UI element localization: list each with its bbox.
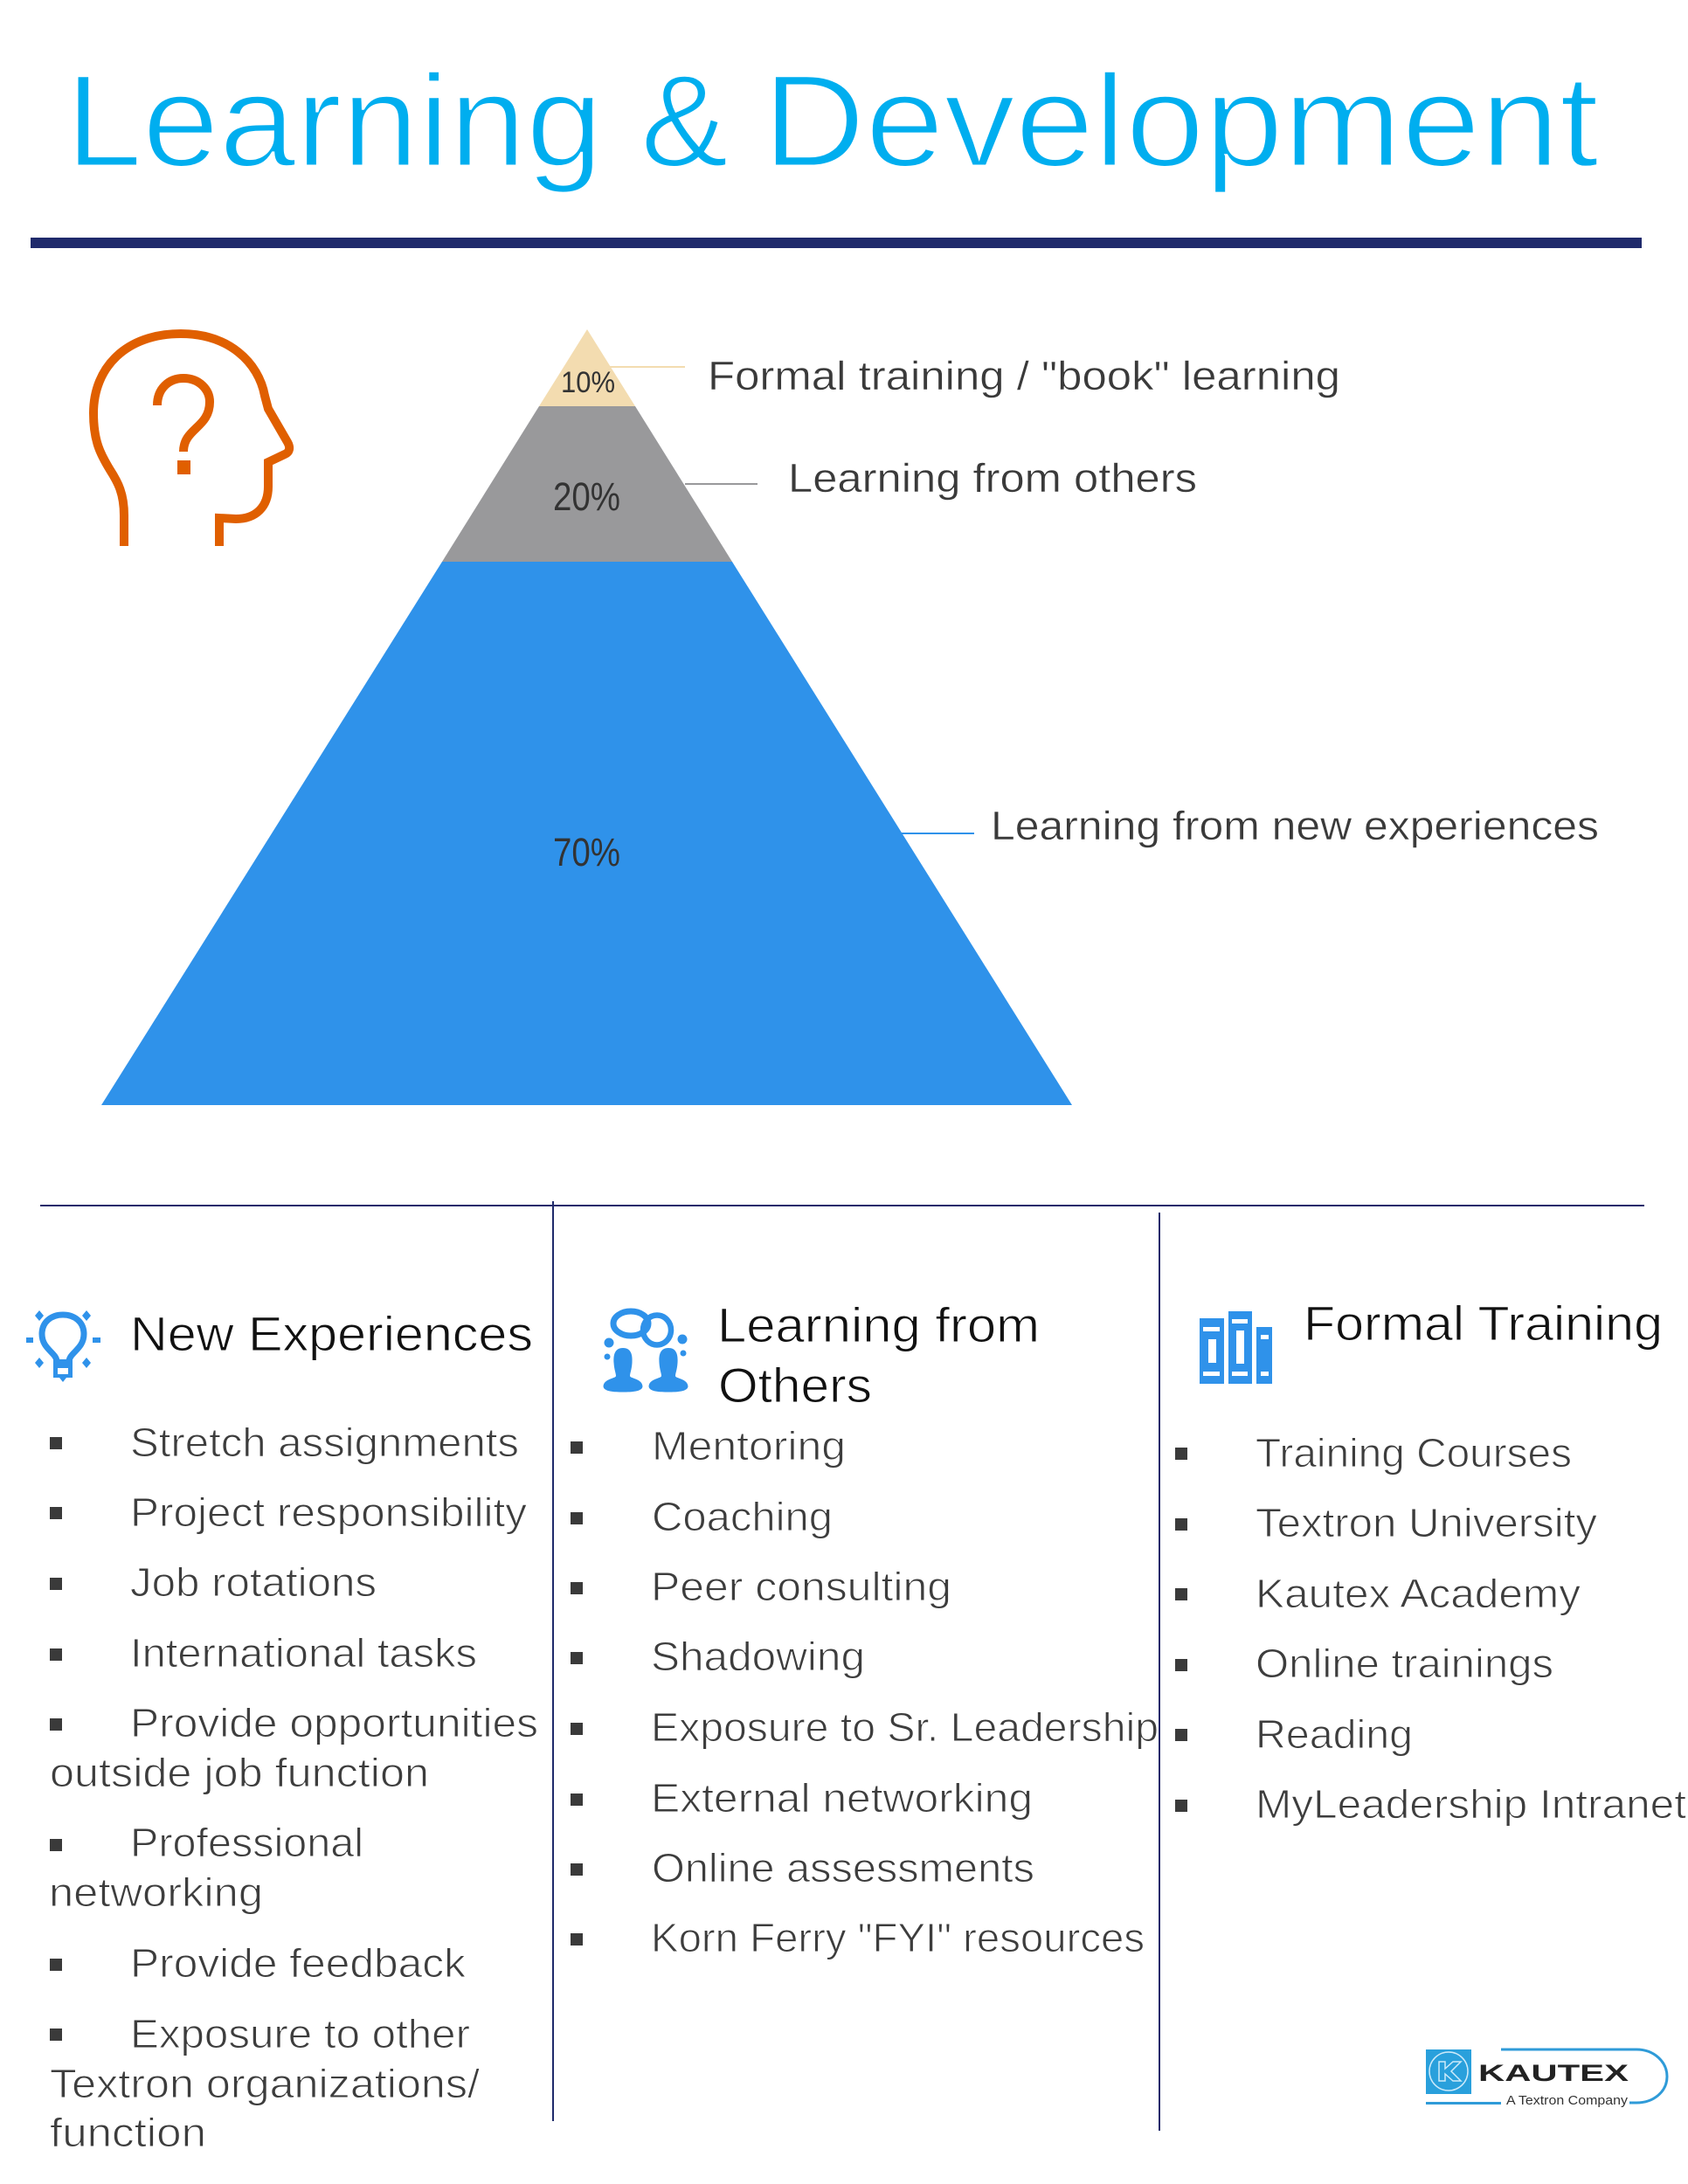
column divider right (1159, 1213, 1160, 2131)
list item: provide opportunities (50, 1700, 538, 1795)
list item: reading (1175, 1711, 1413, 1757)
list item: mentoring (571, 1423, 846, 1469)
icon: books (1200, 1311, 1272, 1384)
list item: stretch assignments: Stretch assignments (130, 1420, 519, 1465)
heading: new experiences: New Experiences (130, 1306, 533, 1361)
list item: textron university: Textron University (1256, 1500, 1597, 1545)
heading: formal training: Formal Training (1304, 1296, 1663, 1351)
logo: kautex: KAUTEX (1478, 2060, 1629, 2086)
list item: reading: Reading (1256, 1711, 1413, 1757)
title: Development (763, 47, 1599, 194)
pyramid segment: 10% (539, 329, 635, 406)
leader line: formal training (609, 366, 685, 368)
list item: exposure to senior leadership: Exposure to Sr. Leadership (651, 1704, 1159, 1750)
list item: coaching: Coaching (652, 1494, 833, 1539)
title: & (640, 47, 729, 194)
list item: shadowing (571, 1634, 865, 1679)
list item: exposure to other textron organizations (50, 2011, 480, 2155)
list item: peer consulting: Peer consulting (651, 1564, 951, 1609)
list item: online assessments: Online assessments (652, 1845, 1034, 1890)
list item: kautex academy: Kautex Academy (1256, 1571, 1581, 1616)
list item: exposure to other textron organizations: Exposure to other (130, 2011, 470, 2056)
list item: international tasks: International tasks (130, 1630, 477, 1676)
icon: people with speech circles (603, 1311, 688, 1393)
panel: formal training (1175, 1296, 1686, 1827)
list item: training courses: Training Courses (1256, 1430, 1572, 1476)
list item: professional networking (49, 1820, 363, 1915)
list item: professional networking: Professional (130, 1820, 363, 1865)
list item: provide feedback: Provide feedback (130, 1940, 467, 1986)
value: 20%: 20% (553, 474, 620, 519)
list item: project responsibility: Project responsibility (130, 1489, 527, 1535)
icon: light bulb (26, 1310, 100, 1382)
list item: online trainings: Online trainings (1256, 1641, 1553, 1686)
logo: kautex: A Textron Company (1506, 2093, 1629, 2108)
panel: learning from others (571, 1297, 1159, 1960)
value: 10%: 10% (561, 366, 615, 399)
list item: shadowing: Shadowing (651, 1634, 865, 1679)
label: new experiences: Learning from new experiences (991, 803, 1599, 848)
list item: provide opportunities: outside job function (50, 1750, 429, 1795)
list item: external networking: External networking (651, 1775, 1033, 1821)
list item: exposure to other textron organizations: Textron organizations/ (50, 2061, 480, 2106)
list item: job rotations: Job rotations (130, 1559, 377, 1605)
pyramid chart (101, 329, 1072, 1105)
list item: exposure to other textron organizations: function (50, 2110, 206, 2155)
list item: myleadership intranet: MyLeadership Intranet (1256, 1781, 1686, 1827)
label: learning from others: Learning from others (788, 455, 1197, 501)
section divider horizontal (40, 1205, 1644, 1206)
title: Learning (66, 47, 603, 194)
column divider left (552, 1201, 554, 2121)
value: 70%: 70% (553, 830, 620, 874)
heading line 2: Others (718, 1358, 872, 1413)
list item: provide opportunities: Provide opportunities (130, 1700, 538, 1745)
list item: mentoring: Mentoring (652, 1423, 846, 1469)
icon: head with question mark (93, 334, 289, 546)
logo: kautex (1426, 2049, 1667, 2108)
title (66, 47, 1599, 194)
panel: new experiences (26, 1306, 538, 2155)
leader line: learning from others (685, 483, 758, 485)
title rule (31, 238, 1642, 248)
pyramid segment: 20% (442, 406, 732, 562)
list item: korn ferry fyi resources: Korn Ferry "FYI" resources (651, 1915, 1145, 1960)
label: formal training: Formal training / "book" learning (708, 353, 1340, 398)
heading: learning from others: Learning from (717, 1297, 1040, 1352)
pyramid segment: 70% (101, 562, 1072, 1105)
leader line: new experiences (899, 833, 974, 834)
list item: professional networking: networking (49, 1870, 263, 1915)
list item: coaching (571, 1494, 833, 1539)
